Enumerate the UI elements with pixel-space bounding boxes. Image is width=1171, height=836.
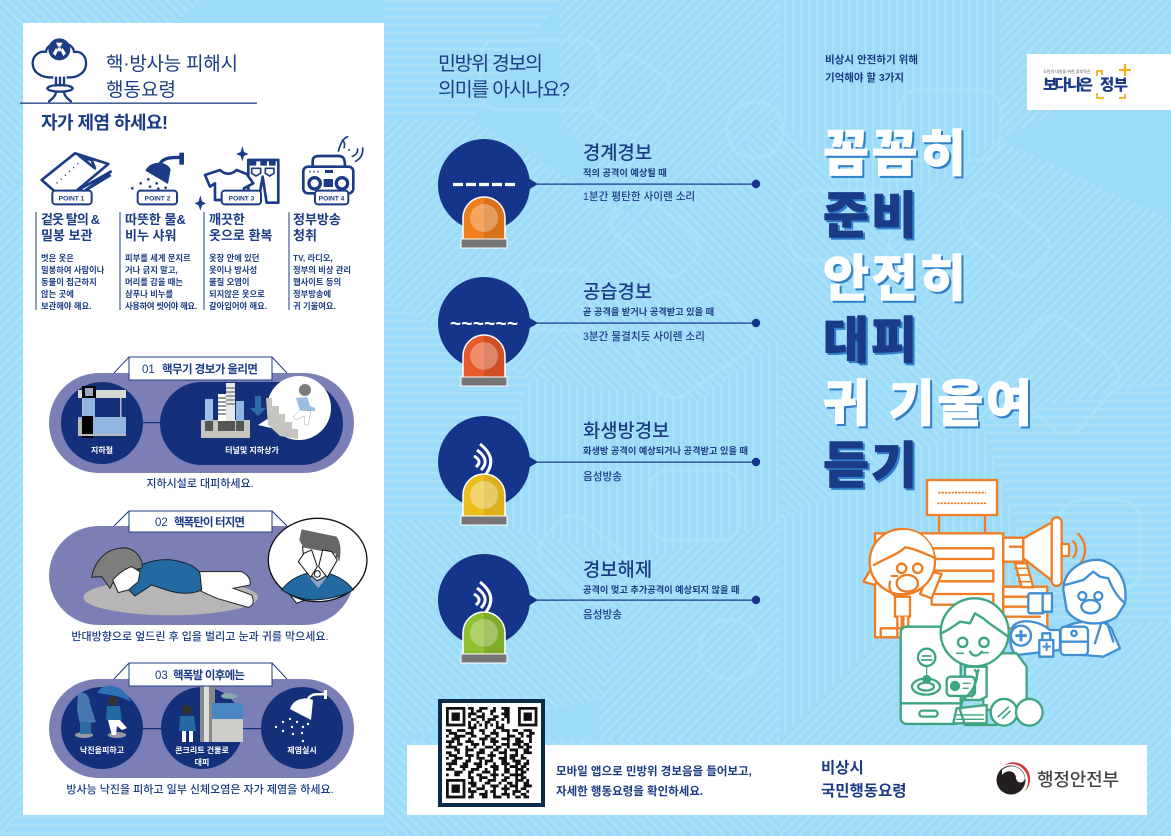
government logo: 국민의 내일을 위한 정부혁신: [1043, 68, 1091, 74]
speech circle: covering eyes and ears: [268, 518, 367, 603]
government logo: 정부: [1100, 76, 1128, 94]
title line 6: 듣기: [823, 438, 917, 494]
warning 4: all clear: 공격이 멎고 추가공격이 예상되지 않을 때: [583, 584, 739, 595]
warning 1: alert: [438, 139, 760, 248]
point 3 text: [204, 212, 272, 311]
footer band: [407, 745, 1147, 815]
point 3 text: 물질 오염이: [209, 277, 249, 287]
heading: civil defense warning meaning: [438, 53, 570, 101]
point 3 text: 깨끗한: [209, 212, 245, 227]
main title: [823, 126, 1032, 494]
label: shelter in concrete building: [175, 745, 230, 767]
section 01: nuclear warning: 01: [142, 364, 155, 376]
point 4 text: TV, 라디오,: [293, 253, 333, 263]
icon: shower: [131, 153, 184, 204]
heading: civil defense warning meaning: 의미를 아시나요?: [438, 79, 570, 101]
illustration: concrete building shelter: [179, 685, 243, 742]
title line 2: 준비: [823, 188, 917, 244]
point 2 text: 거나 긁지 말고,: [125, 265, 178, 275]
government logo: [1027, 54, 1171, 110]
point 2 text: 머리를 감을 때는: [125, 277, 183, 287]
warning 3: chemical and biological: 화생방 공격이 예상되거나 공격받고 있을 때: [583, 445, 748, 456]
point 1 text: 겉옷 탈의 &: [41, 212, 100, 227]
point 3 text: 옷으로 환복: [209, 228, 272, 243]
heading: civil defense warning meaning: 민방위 경보의: [438, 53, 543, 75]
point 2 text: 피부를 세게 문지르: [125, 253, 191, 263]
point 4 text: 정부방송: [293, 212, 341, 227]
warning 1: alert: 경계경보: [583, 142, 652, 163]
point 4 text: 청취: [293, 228, 317, 243]
icon: radio: [303, 137, 363, 204]
point 4 text: 정부의 비상 관리: [293, 265, 351, 275]
point 4 text: 정부방송에: [293, 289, 331, 299]
label: subway: 지하철: [91, 445, 113, 455]
section 02: nuclear explosion: [49, 511, 367, 625]
warning 2: air raid: 곧 공격을 받거나 공격받고 있을 때: [583, 306, 714, 317]
point 1 text: 동물이 접근하지: [41, 277, 97, 287]
warning 4: all clear: [438, 554, 760, 663]
panel: nuclear and radiation response: [20, 23, 384, 815]
heading rule: [20, 102, 257, 104]
label: point 3: POINT 3: [229, 196, 255, 202]
label: avoid fallout: 낙진을피하고: [80, 745, 125, 755]
label: point 4: POINT 4: [319, 196, 345, 202]
point 2 text: [120, 212, 197, 311]
warning 3: chemical and biological: 화생방경보: [583, 420, 669, 441]
girl in orange: [863, 529, 942, 628]
point 2 text: 따뜻한 물&: [125, 212, 186, 227]
icon: clean clothes: [195, 146, 278, 211]
footer title: 국민행동요령: [821, 782, 907, 800]
point 3 text: 되지않은 옷으로: [209, 289, 265, 299]
warning 4: all clear: 음성방송: [583, 608, 622, 621]
section 03: after explosion: 03: [155, 670, 168, 682]
warning 2: air raid: 공습경보: [583, 281, 652, 302]
footer title: [821, 759, 907, 800]
panel title: 행동요령: [106, 79, 176, 101]
warning 2: air raid: [438, 277, 760, 386]
woman in blue: [1010, 560, 1126, 657]
illustration: person lying face down: [83, 548, 258, 615]
point 2 text: 사용하여 씻어야 해요.: [125, 301, 197, 311]
icon: subway entrance: [78, 386, 126, 438]
title line 3: 안전히: [823, 251, 966, 307]
section 02: nuclear explosion: 02: [155, 517, 168, 529]
footer instruction text: 모바일 앱으로 민방위 경보음을 들어보고,: [556, 764, 752, 778]
point 1 text: 않는 곳에: [41, 289, 74, 299]
phone and boy in green: [901, 598, 1043, 726]
label: tunnel and underground mall: 터널및 지하상가: [225, 445, 280, 455]
warning 3: chemical and biological: 음성방송: [583, 470, 622, 483]
point 3 text: 옷이나 방사성: [209, 265, 257, 275]
ministry logo: 행정안전부: [1037, 770, 1119, 790]
point 2 text: 샴푸나 비누를: [125, 289, 173, 299]
point 1 text: 벗은 옷은: [41, 253, 74, 263]
warning 1: alert: 적의 공격이 예상될 때: [583, 167, 667, 178]
label: point 2: POINT 2: [145, 196, 171, 202]
title line 5: 귀 기울여: [823, 376, 1032, 432]
caption 01: 지하시설로 대피하세요.: [146, 476, 254, 490]
section 01: nuclear warning: [49, 357, 354, 473]
intro text: 기억해야 할 3가지: [825, 71, 904, 84]
section 01: nuclear warning: 핵무기 경보가 울리면: [162, 362, 258, 376]
QR code: [440, 701, 543, 805]
point 1 text: 보관해야 해요.: [41, 301, 91, 311]
point 4 text: 웹사이트 등의: [293, 277, 341, 287]
intro text: [825, 53, 918, 84]
warning 2: air raid: ~~~~~~: [450, 314, 518, 335]
sign and building: [875, 480, 1085, 637]
intro text: 비상시 안전하기 위해: [825, 53, 918, 66]
panel title: 핵·방사능 피해시: [106, 53, 238, 75]
title line 1: 꼼꼼히: [823, 126, 966, 182]
point 4 text: 귀 기울여요.: [293, 301, 336, 311]
illustration: avoiding fallout: [75, 686, 131, 738]
point 1 text: 밀봉 보관: [41, 228, 92, 243]
point 1 text: [36, 212, 105, 311]
point 3 text: 옷장 안에 있던: [209, 253, 259, 263]
label: shelter in concrete building: 콘크리트 건물로: [175, 745, 230, 755]
illustration: emergency characters: [863, 480, 1126, 726]
warning 2: air raid: 3분간 물결치듯 사이렌 소리: [583, 330, 705, 343]
point 2 text: 비누 샤워: [125, 228, 176, 243]
government logo: 보다 나은: [1043, 76, 1093, 94]
footer title: 비상시: [821, 759, 864, 777]
warning 3: chemical and biological: [438, 416, 760, 525]
warning 1: alert: 1분간 평탄한 사이렌 소리: [583, 191, 695, 203]
title line 4: 대피: [823, 313, 917, 369]
illustration: shower decontamination: [275, 690, 327, 742]
point 1 text: 밀봉하여 사람이나: [41, 265, 105, 275]
footer instruction text: 자세한 행동요령을 확인하세요.: [556, 784, 703, 798]
icon: folded clothes: [42, 153, 111, 204]
point 3 text: 갈아입어야 해요.: [209, 301, 267, 311]
footer instruction text: [556, 764, 752, 798]
section 02: nuclear explosion: 핵폭탄이 터지면: [174, 515, 245, 529]
section 03: after explosion: [49, 663, 354, 778]
label: decontamination: 제염실시: [287, 745, 317, 755]
ministry logo: [996, 762, 1119, 794]
heading: self decontamination: 자가 제염 하세요!: [41, 113, 168, 133]
icon: city over underground: [201, 383, 266, 438]
caption 03: 방사능 낙진을 피하고 일부 신체오염은 자가 제염을 하세요.: [66, 782, 334, 796]
section 03: after explosion: 핵폭발 이후에는: [173, 668, 245, 682]
caption 02: 반대방향으로 엎드린 후 입을 벌리고 눈과 귀를 막으세요.: [71, 629, 329, 643]
label: point 1: POINT 1: [59, 196, 85, 202]
speech circle: person on stairs: [258, 376, 331, 440]
panel title: [106, 53, 238, 101]
label: shelter in concrete building: 대피: [195, 757, 209, 767]
icon: mushroom cloud: [33, 38, 86, 102]
point 4 text: [288, 212, 351, 311]
warning 4: all clear: 경보해제: [583, 559, 652, 580]
